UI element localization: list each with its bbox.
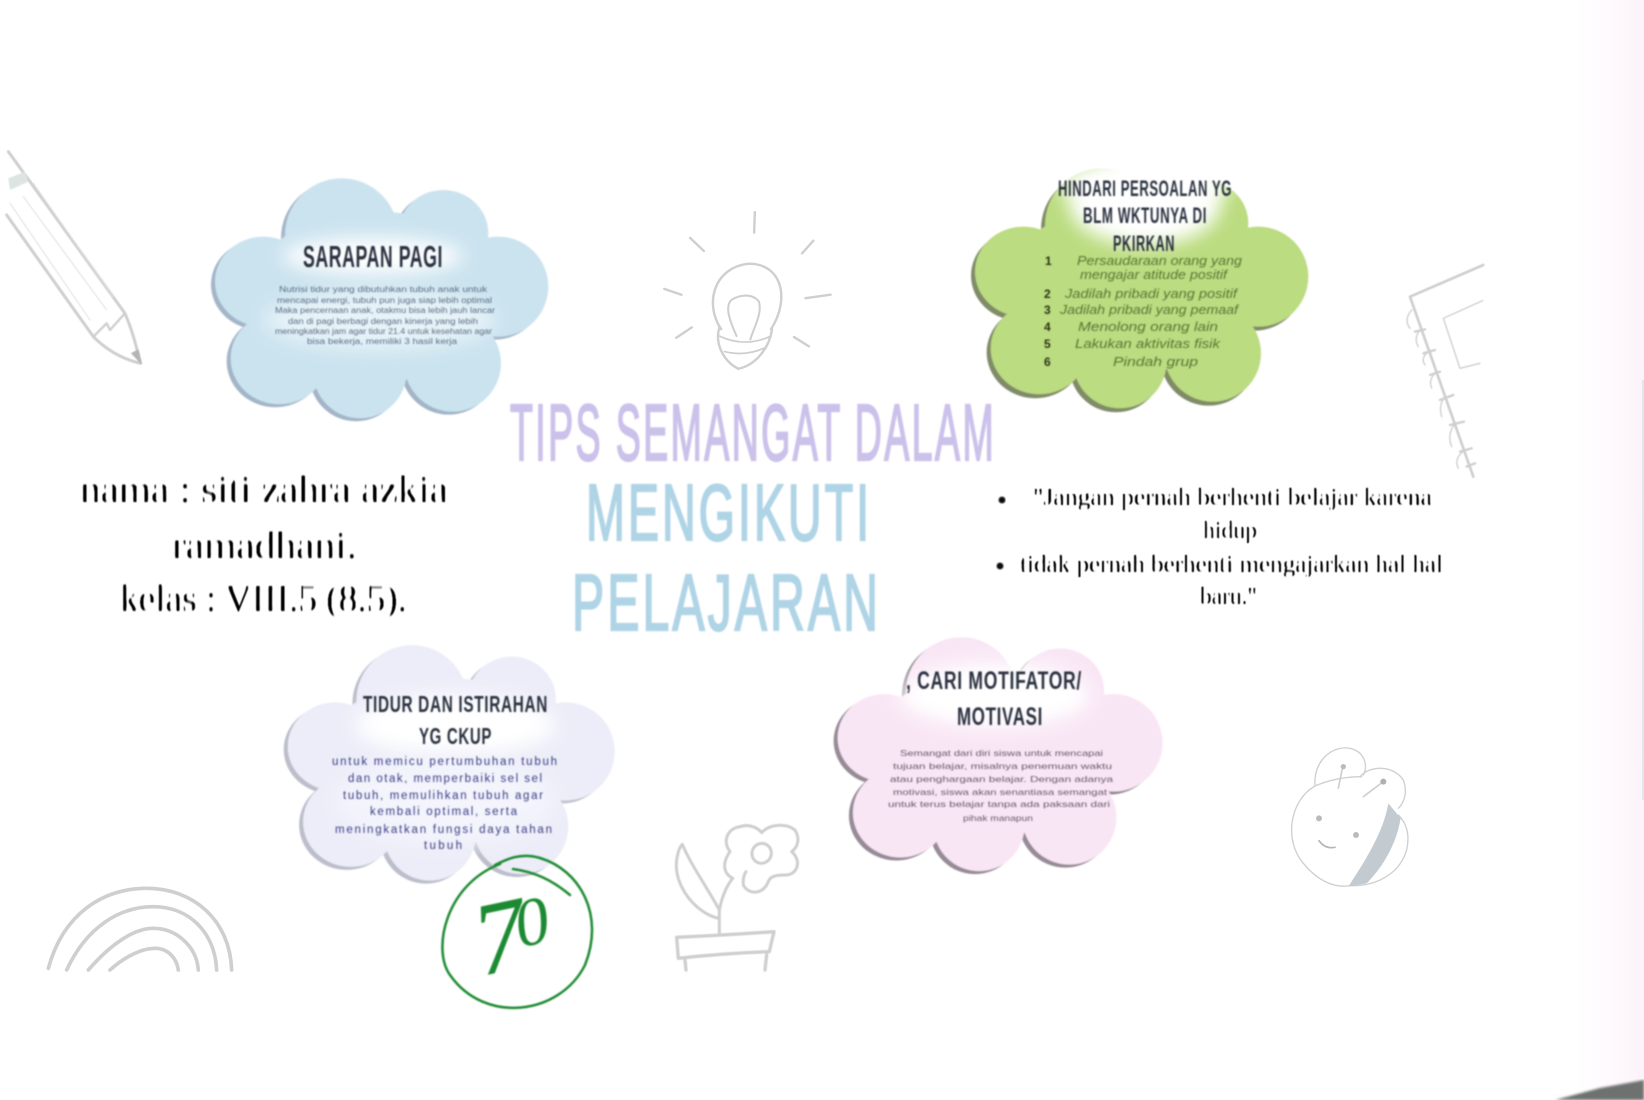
body text: motivasi: untuk terus belajar tanpa ada paksaan dari xyxy=(888,799,1110,809)
body text: sarapan pagi: Maka pencernaan anak, otakmu bisa lebih jauh lancar xyxy=(275,306,495,315)
text: TIPS SEMANGAT DALAM xyxy=(510,388,996,477)
cloud shape: lavender xyxy=(284,645,615,884)
body text: tidur xyxy=(332,756,557,852)
body text: motivasi: pihak manapun xyxy=(963,813,1033,823)
body text: motivasi: atau penghargaan belajar. Dengan adanya xyxy=(890,774,1113,784)
body text: motivasi: motivasi, siswa akan senantiasa semangat xyxy=(893,787,1108,797)
numbered list: Jadilah pribadi yang positif xyxy=(1064,287,1239,301)
heading: tidur dan istirahan xyxy=(363,691,548,749)
stamp circle xyxy=(442,856,592,1008)
quote list: tidak pernah berhenti mengajarkan hal hal xyxy=(1020,552,1443,578)
handwritten score: 0 xyxy=(507,881,556,962)
quote list: baru." xyxy=(1200,584,1257,610)
heading: tidur dan istirahan: TIDUR DAN ISTIRAHAN xyxy=(363,691,548,717)
title line 3: PELAJARAN xyxy=(572,558,881,647)
heading: cari motifator: MOTIVASI xyxy=(957,703,1043,731)
numbered list: Lakukan aktivitas fisik xyxy=(1075,337,1221,351)
body text: tidur: tubuh xyxy=(424,840,462,852)
student name block: ramadhani. xyxy=(172,525,357,567)
panel: hindari persoalan xyxy=(971,161,1308,412)
icon: pencil xyxy=(7,152,142,364)
heading: hindari persoalan: BLM WKTUNYA DI xyxy=(1083,203,1207,228)
panel: cari motifator xyxy=(834,637,1163,874)
heading: cari motifator xyxy=(906,667,1082,731)
heading: tidur dan istirahan: YG CKUP xyxy=(419,723,492,749)
numbered list: Persaudaraan orang yang xyxy=(1077,254,1242,268)
body text: motivasi: Semangat dari diri siswa untuk mencapai xyxy=(900,748,1103,758)
numbered list: 5 xyxy=(1044,337,1051,351)
body text: sarapan pagi: dan di pagi berbagi dengan kinerja yang lebih xyxy=(288,317,478,326)
body text: sarapan pagi: meningkatkan jam agar tidur 21.4 untuk kesehatan agar xyxy=(275,327,492,336)
icon: flower pot xyxy=(676,825,798,970)
body text: motivasi xyxy=(888,748,1113,823)
quote list: hidup xyxy=(1203,518,1257,544)
numbered list: 1 xyxy=(1045,254,1052,268)
body text: motivasi: tujuan belajar, misalnya penemuan waktu xyxy=(893,761,1112,771)
numbered list: Menolong orang lain xyxy=(1078,320,1218,334)
heading: sarapan pagi: SARAPAN PAGI xyxy=(303,239,443,274)
icon: notebook xyxy=(1407,265,1483,477)
numbered list: 2 xyxy=(1044,287,1051,301)
student name block xyxy=(80,469,448,620)
panel: sarapan pagi xyxy=(211,178,548,421)
handwritten score: 7 xyxy=(463,874,541,998)
body text: tidur: untuk memicu pertumbuhan tubuh xyxy=(332,756,557,768)
body text: tidur: kembali optimal, serta xyxy=(370,806,518,818)
heading: hindari persoalan: HINDARI PERSOALAN YG xyxy=(1058,176,1232,201)
heading: cari motifator: , CARI MOTIFATOR/ xyxy=(906,667,1082,695)
body text: tidur: tubuh, memulihkan tubuh agar xyxy=(343,790,543,802)
numbered list: Pindah grup xyxy=(1113,355,1198,369)
page edge shading xyxy=(1555,0,1644,1100)
cloud shape: green xyxy=(971,161,1308,412)
body text: sarapan pagi xyxy=(275,285,495,346)
heading: hindari persoalan: PKIRKAN xyxy=(1113,231,1175,256)
numbered list xyxy=(1044,254,1242,369)
heading: hindari persoalan xyxy=(1058,176,1232,256)
icon: bee xyxy=(1292,748,1408,887)
numbered list: Jadilah pribadi yang pemaaf xyxy=(1059,303,1240,317)
title line 2: MENGIKUTI xyxy=(586,468,872,557)
quote list: "Jangan pernah berhenti belajar karena xyxy=(1033,485,1432,511)
numbered list: mengajar atitude positif xyxy=(1080,268,1229,282)
body text: sarapan pagi: Nutrisi tidur yang dibutuhkan tubuh anak untuk xyxy=(279,285,488,294)
body text: tidur: dan otak, memperbaiki sel sel xyxy=(348,773,542,785)
body text: sarapan pagi: mencapai energi, tubuh pun juga siap lebih optimal xyxy=(277,296,492,305)
cloud shape: blue xyxy=(211,178,548,421)
student name block: kelas : VIII.5 (8.5). xyxy=(120,578,407,620)
icon: light bulb xyxy=(664,212,831,369)
title xyxy=(510,388,996,647)
student name block: nama : siti zahra azkia xyxy=(80,469,448,511)
icon: rainbow xyxy=(48,888,232,970)
body text: tidur: meningkatkan fungsi daya tahan xyxy=(335,824,552,836)
numbered list: 6 xyxy=(1044,355,1051,369)
quote list xyxy=(1020,485,1443,610)
cloud shape: pink xyxy=(834,637,1163,874)
grade stamp: 70 xyxy=(442,856,592,1008)
numbered list: 4 xyxy=(1044,320,1051,334)
body text: sarapan pagi: bisa bekerja, memiliki 3 hasil kerja xyxy=(307,337,458,346)
bullets xyxy=(997,497,1005,569)
numbered list: 3 xyxy=(1044,303,1051,317)
panel: tidur dan istirahat xyxy=(284,645,615,884)
